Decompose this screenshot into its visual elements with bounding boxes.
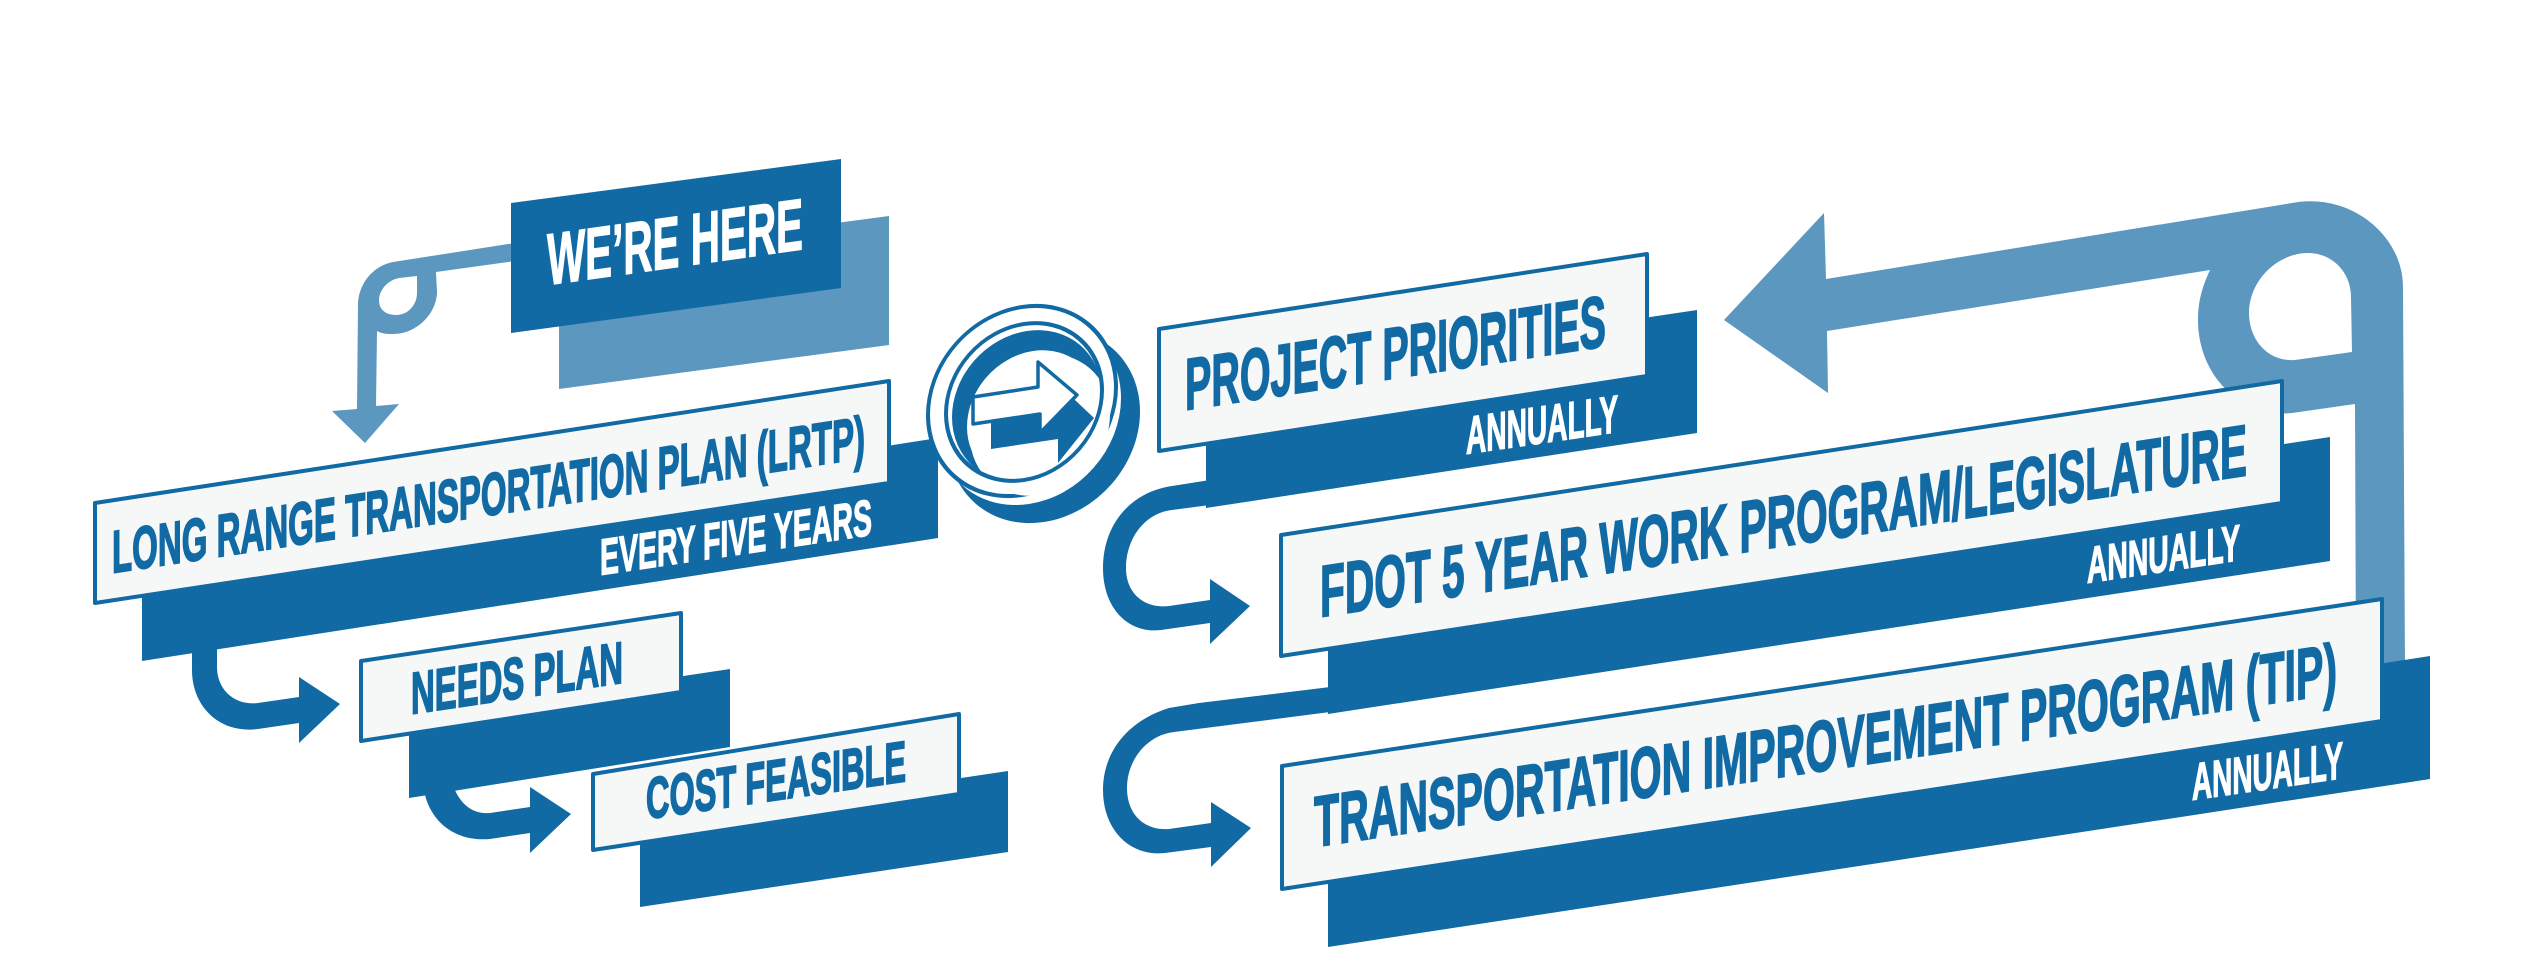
text: annually: ANNUALLY (1466, 385, 1618, 466)
heading: we're here: WE’RE HERE (547, 183, 803, 301)
panel: project priorities (1159, 254, 1697, 508)
panel: FDOT 5 year work program (1281, 381, 2330, 714)
panel: transportation improvement program (1282, 599, 2430, 947)
text: annually: ANNUALLY (2192, 732, 2343, 812)
panel: long range transportation plan (95, 381, 938, 661)
arrow: we're here to LRTP (332, 243, 515, 443)
arrow: long feedback arrow from TIP to project priorities (1724, 201, 2405, 670)
arrow: needs plan to cost feasible (425, 785, 571, 853)
arrow: FDOT work program to TIP (1103, 687, 1330, 867)
heading: needs plan: NEEDS PLAN (411, 629, 623, 727)
text: annually: ANNUALLY (2087, 514, 2240, 594)
text: every five years: EVERY FIVE YEARS (600, 489, 872, 586)
arrow: project priorities to FDOT work program (1103, 480, 1250, 644)
heading: project priorities: PROJECT PRIORITIES (1185, 280, 1606, 426)
icon: circular arrow logo (928, 293, 1140, 536)
panel: we're here tag (511, 159, 889, 389)
panel: needs plan (361, 613, 730, 798)
panel: cost feasible (593, 714, 1008, 907)
arrow: LRTP to needs plan (192, 645, 340, 743)
heading: cost feasible: COST FEASIBLE (646, 729, 906, 832)
heading: LRTP: LONG RANGE TRANSPORTATION PLAN (LRTP) (112, 403, 865, 586)
